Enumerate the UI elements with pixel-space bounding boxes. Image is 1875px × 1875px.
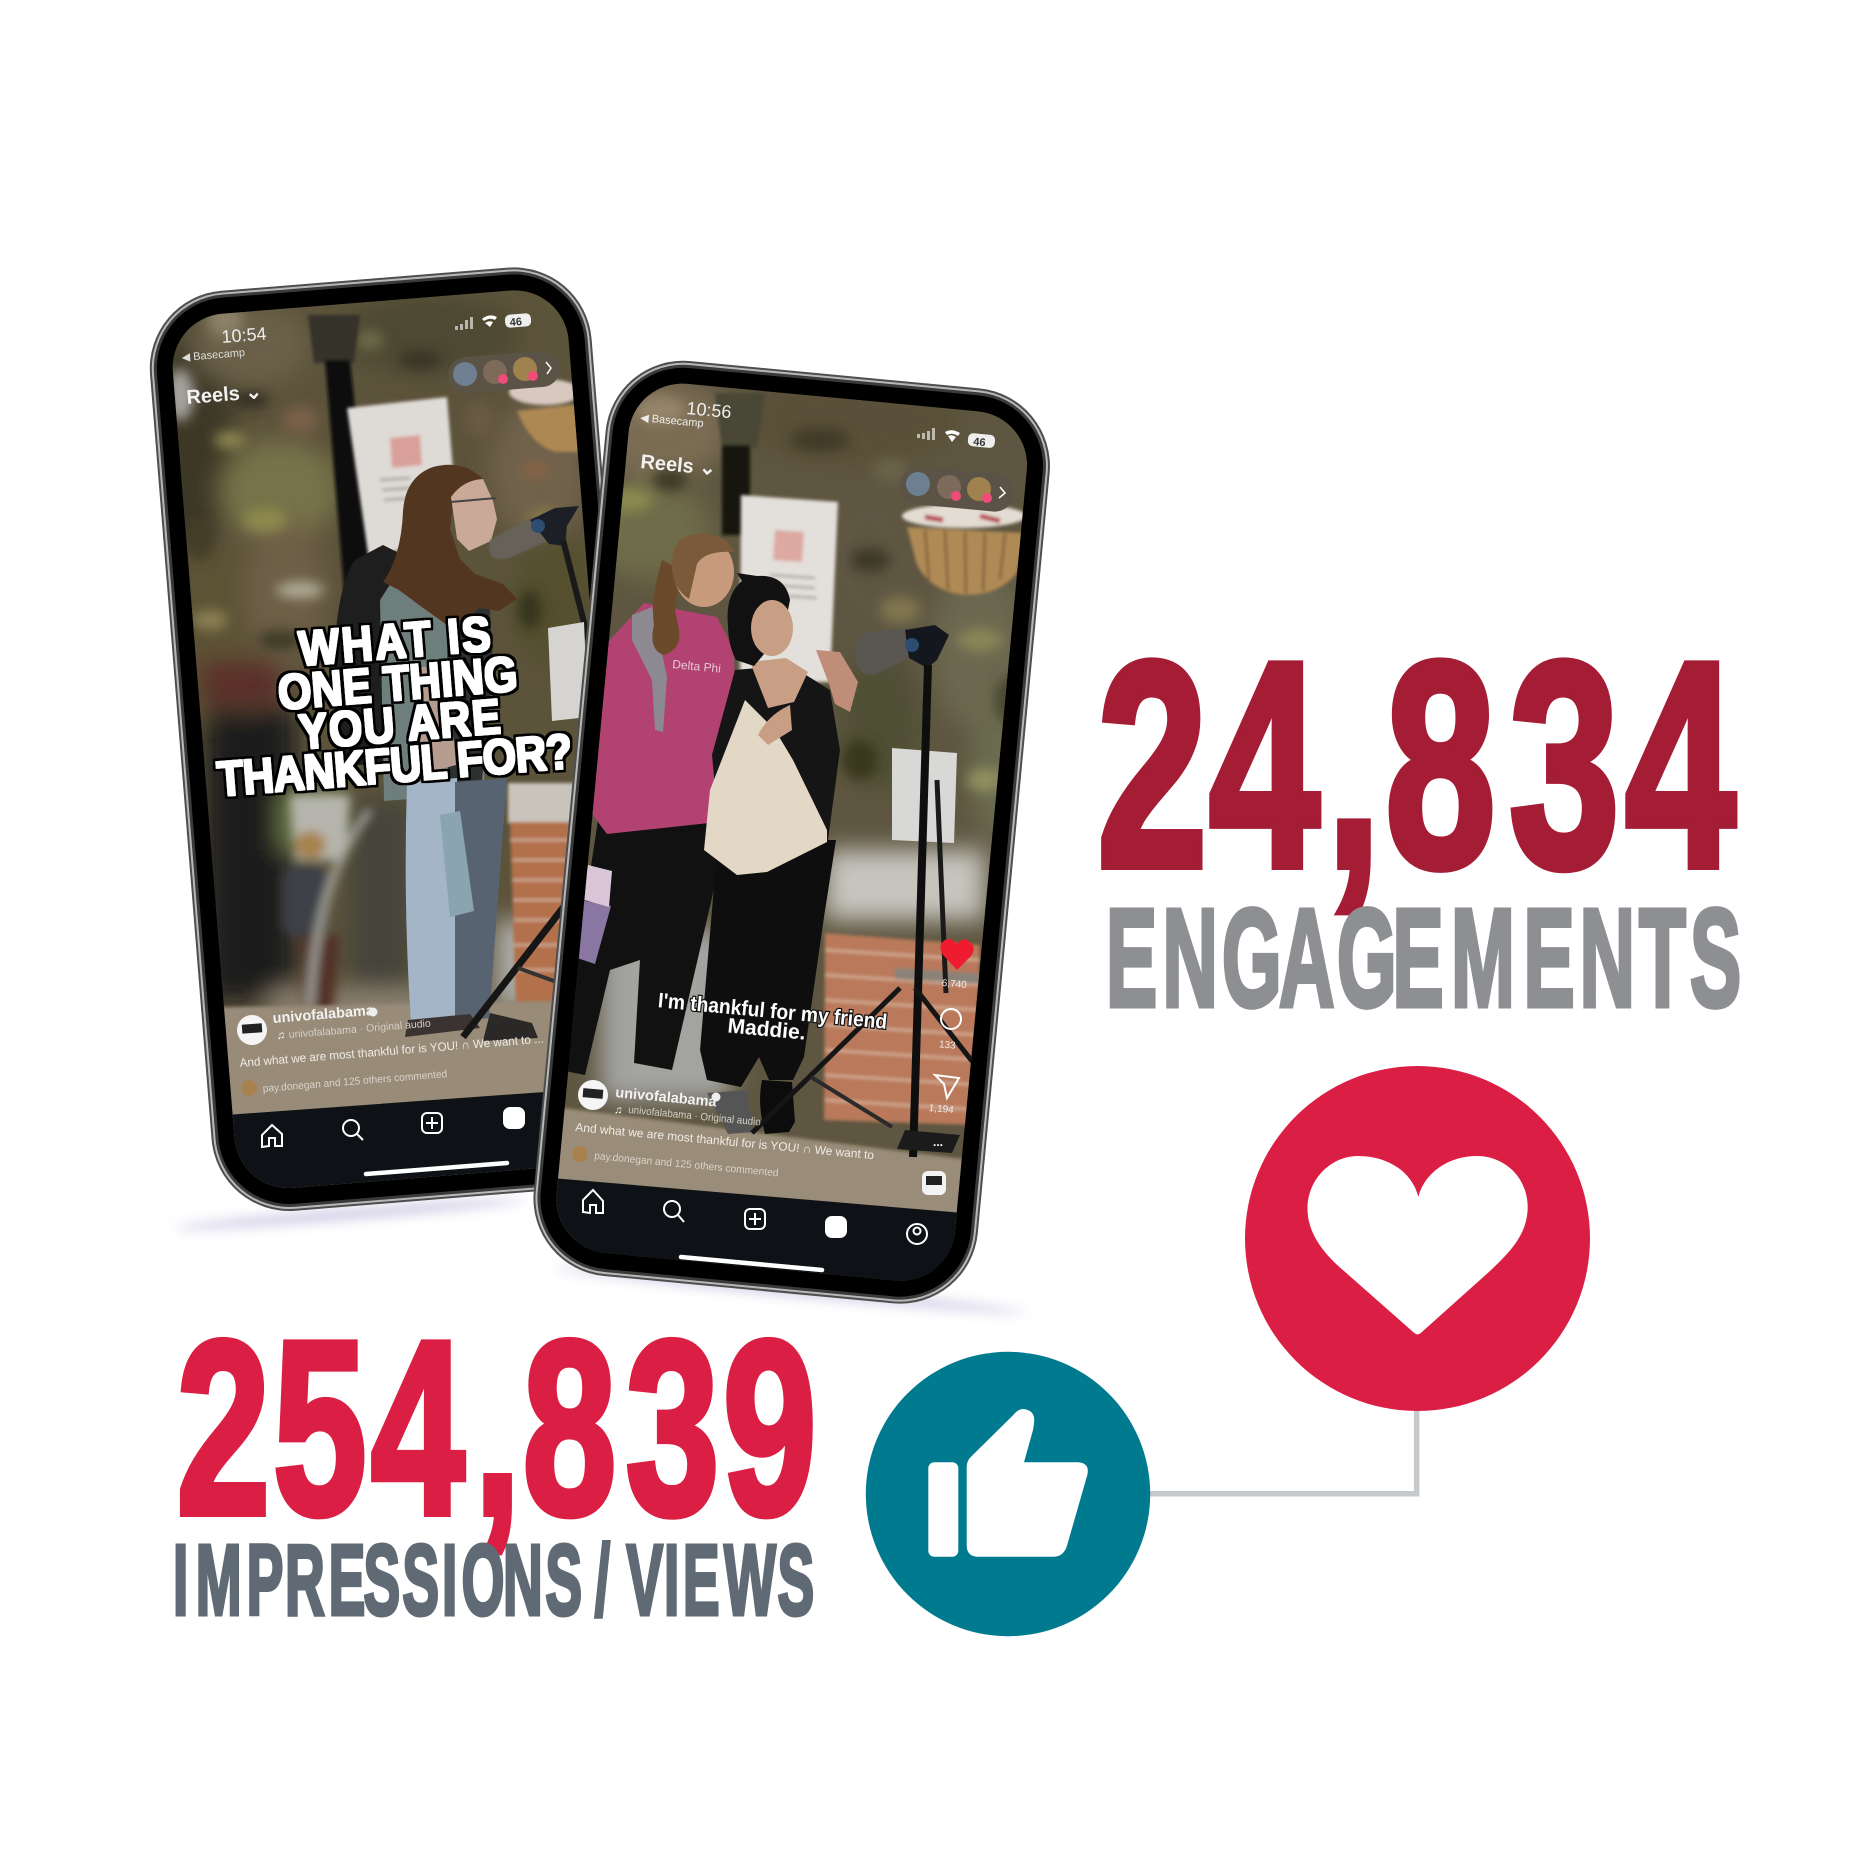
phone frame: right xyxy=(526,354,1057,1311)
phone shadow: right xyxy=(556,1263,1024,1317)
navigation bar xyxy=(232,1092,544,1188)
phone: right reel xyxy=(526,350,1070,1311)
nav icons xyxy=(583,1190,927,1244)
home indicator xyxy=(681,1257,822,1270)
reel overlay question xyxy=(215,606,574,807)
pants xyxy=(700,840,836,1087)
connector line xyxy=(1150,1411,1417,1494)
ground xyxy=(224,1000,552,1188)
account row: ♫ xyxy=(276,1029,285,1042)
chest xyxy=(750,658,808,708)
home indicator xyxy=(366,1163,507,1174)
account row: univofalabama xyxy=(272,1003,375,1027)
label: IMPRESSIONS/VIEWS: IMPRESSIONS/VIEWS xyxy=(173,1525,814,1637)
jeans xyxy=(406,778,458,1020)
reel overlay question: THANKFUL FOR? xyxy=(215,723,574,807)
top xyxy=(712,665,840,840)
reaction icons: 6,740 xyxy=(941,978,968,991)
back to Basecamp: ◀ Basecamp xyxy=(640,412,704,430)
icon: heart badge xyxy=(1245,1066,1590,1411)
reel overlay question: ONE THING xyxy=(276,646,519,720)
number: 24,834: 24,834 xyxy=(1097,602,1736,929)
Reels heading: Reels ⌄ xyxy=(186,381,263,409)
right student xyxy=(700,573,858,1134)
student xyxy=(335,465,538,1041)
lamp post xyxy=(308,315,374,590)
phone shadow: left xyxy=(175,1195,525,1233)
backpack xyxy=(335,545,403,765)
friends activity pill xyxy=(447,350,561,394)
hoodie xyxy=(589,603,737,834)
arm xyxy=(414,666,456,770)
subtitle: I'm thankful for my friend xyxy=(657,989,888,1034)
label: ENGAGEMENTS: ENGAGEMENTS xyxy=(1106,880,1741,1036)
pants xyxy=(560,820,730,1075)
backdrop people xyxy=(282,795,370,1045)
banner xyxy=(347,397,454,560)
status bar xyxy=(181,313,532,364)
caption: And what we are most thankful for is YOU! ∩ We want to ... xyxy=(239,1032,544,1070)
hair xyxy=(383,465,517,630)
foliage speckles xyxy=(597,396,1026,792)
account row: univofalabama xyxy=(615,1085,718,1111)
reel overlay question: YOU ARE xyxy=(297,688,503,760)
status icons: 46 xyxy=(973,436,986,449)
number: 254,839: 254,839 xyxy=(176,1289,817,1566)
comment line: pay.donegan and 125 others commented xyxy=(594,1150,779,1179)
caption: And what we are most thankful for is YOU! ∩ We want to xyxy=(575,1120,875,1162)
reaction icons: ... xyxy=(933,1135,943,1149)
battery: 46 xyxy=(509,316,522,329)
reel screen: two students xyxy=(530,350,1070,1310)
phone frame: left xyxy=(144,261,659,1217)
ground xyxy=(540,1105,1010,1240)
backpack strap xyxy=(632,607,667,732)
blurred campus background xyxy=(145,295,595,1020)
back to Basecamp: ◀ Basecamp xyxy=(181,347,246,364)
water bottle xyxy=(440,811,474,917)
brick pillar xyxy=(824,933,985,1125)
navigation bar xyxy=(540,1177,1010,1310)
account row: univofalabama · Original audio xyxy=(628,1104,761,1129)
microphone and stand xyxy=(463,506,600,1037)
stat: impressions xyxy=(173,1289,817,1637)
account row xyxy=(578,1080,761,1129)
lamp post xyxy=(715,393,765,535)
subtitle: Maddie. xyxy=(727,1014,807,1045)
shoes xyxy=(405,1014,480,1037)
hanging basket xyxy=(902,504,1026,595)
tote bag xyxy=(704,700,827,875)
face xyxy=(751,600,793,656)
hoodie print: Delta Phi xyxy=(672,657,722,676)
friends activity pill xyxy=(898,465,1016,513)
hand xyxy=(816,650,858,712)
left student xyxy=(560,534,737,1075)
reel screen: student at microphone xyxy=(172,290,590,1188)
wifi xyxy=(482,315,497,327)
face xyxy=(451,479,497,551)
stat: engagements xyxy=(1097,602,1741,1036)
account row xyxy=(237,1003,431,1045)
shoes xyxy=(707,1090,753,1134)
phone: left reel xyxy=(150,267,602,1211)
braid xyxy=(652,560,681,655)
reaction icons: 133 xyxy=(938,1039,956,1052)
blurred campus background xyxy=(590,375,1030,1100)
nav icons xyxy=(262,1108,524,1147)
banner xyxy=(740,495,838,682)
brick pillar xyxy=(506,780,572,1003)
water bottle xyxy=(571,900,611,964)
comment line: pay.donegan and 125 others commented xyxy=(262,1068,448,1095)
status icons xyxy=(917,428,996,449)
foliage speckles xyxy=(166,302,563,650)
vest xyxy=(447,608,492,782)
head xyxy=(674,537,734,607)
reaction icons: 1,194 xyxy=(928,1103,955,1116)
microphone and stand xyxy=(752,625,975,1157)
reel overlay question: WHAT IS xyxy=(297,606,493,676)
Reels heading: Reels ⌄ xyxy=(640,451,717,480)
account row: ♫ xyxy=(614,1104,623,1117)
clock: 10:56 xyxy=(686,398,732,422)
signal bars xyxy=(455,317,473,330)
battery xyxy=(505,313,532,329)
hanging basket xyxy=(509,379,581,452)
hair xyxy=(728,573,790,666)
shirt xyxy=(380,585,484,801)
account row: univofalabama · Original audio xyxy=(288,1018,431,1041)
icon: thumbs up badge xyxy=(866,1352,1150,1636)
clock: 10:54 xyxy=(221,323,267,347)
reaction icons xyxy=(922,939,974,1195)
